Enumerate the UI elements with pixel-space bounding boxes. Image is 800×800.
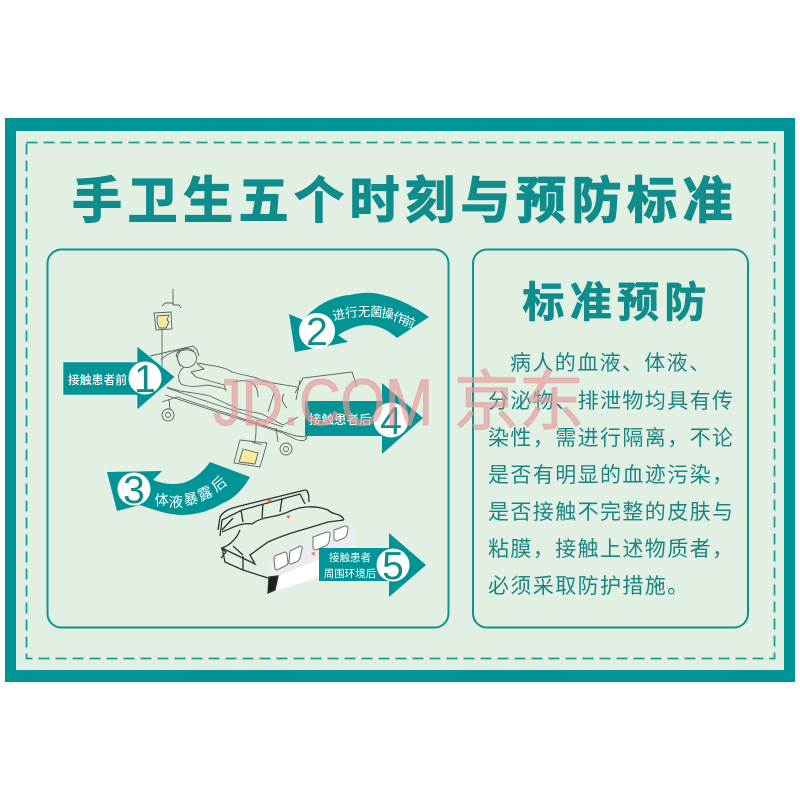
panel body text: 必须采取防护措施。	[488, 575, 690, 598]
arrow 3: after body fluid exposure: 暴	[182, 490, 200, 509]
arrow 3: after body fluid exposure: 露	[195, 483, 216, 505]
arrow 5: after touching patient surroundings: 5	[382, 545, 404, 588]
panel body text: 染性，需进行隔离，不论	[488, 427, 734, 450]
arrow 3: after body fluid exposure: 3	[123, 469, 145, 512]
arrow 3: after body fluid exposure: 后	[208, 473, 230, 496]
watermark: JD.COM	[213, 365, 433, 439]
arrow 2: before aseptic operation: 2	[306, 311, 328, 354]
arrow 2: before aseptic operation	[289, 293, 429, 354]
panel body text: 分泌物、排泄物均具有传	[488, 390, 734, 413]
panel body text: 病人的血液、体液、	[510, 352, 712, 375]
illustration: patient on bed with IV	[150, 289, 357, 467]
panel body text: 是否有明显的血迹污染，	[488, 464, 734, 487]
arrow 5: after touching patient surroundings: 周围环境后	[324, 567, 376, 580]
illustration: hospital bed	[218, 490, 355, 593]
arrow 3: after body fluid exposure: 液	[168, 494, 183, 511]
arrow 3: after body fluid exposure	[107, 462, 250, 515]
arrow 2: before aseptic operation: 操	[380, 305, 396, 322]
title: 手卫生五个时刻与预防标准	[72, 173, 738, 229]
arrow 4: after touching patient: 4	[380, 400, 402, 443]
arrow 4: after touching patient	[305, 383, 423, 454]
panel heading: 标准预防	[522, 279, 712, 326]
arrow 5: after touching patient surroundings	[319, 533, 426, 597]
panel body text	[488, 352, 734, 598]
arrow 1: before touching patient: 1	[134, 358, 156, 401]
panel body text: 是否接触不完整的皮肤与	[488, 501, 734, 524]
arrow 2: before aseptic operation: 前	[400, 313, 417, 331]
arrow 1: before touching patient: 接触患者前	[68, 373, 127, 387]
arrow 1: before touching patient	[63, 346, 175, 410]
poster frame	[5, 118, 795, 682]
arrow 2: before aseptic operation: 菌	[370, 305, 383, 319]
arrow 2: before aseptic operation: 作	[391, 310, 408, 327]
panel: five moments	[48, 250, 448, 628]
arrow 4: after touching patient: 接触患者后	[309, 412, 372, 427]
arrow 2: before aseptic operation: 进	[331, 307, 347, 323]
panel: standard precautions	[473, 250, 748, 628]
arrow 3: after body fluid exposure: 体	[154, 492, 170, 509]
watermark	[213, 365, 584, 439]
watermark: 京东	[454, 365, 584, 438]
arrow 2: before aseptic operation: 行	[344, 305, 359, 321]
panel body text: 粘膜，接触上述物质者，	[488, 538, 734, 561]
arrow 5: after touching patient surroundings: 接触患者	[329, 551, 371, 564]
arrow 2: before aseptic operation: 无	[358, 305, 370, 319]
